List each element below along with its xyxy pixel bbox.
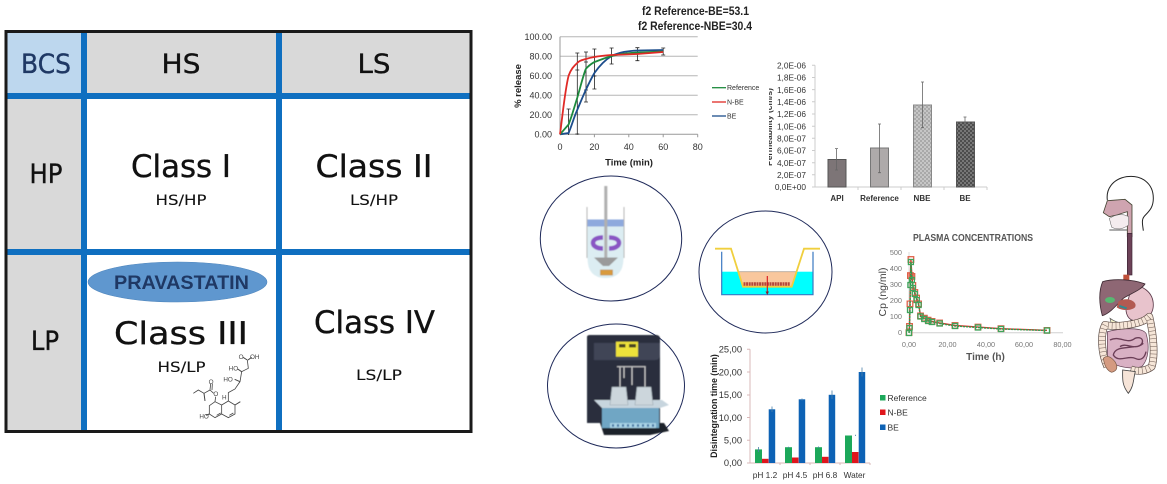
apical compartment (738, 272, 796, 287)
tick labels: 1,8E-06 (777, 72, 806, 82)
bar: reference (870, 148, 888, 187)
paddle shaft (604, 186, 607, 260)
circle: disintegration tester (548, 324, 684, 448)
large intestine (1102, 317, 1154, 371)
legend: BE (888, 422, 899, 432)
line chart: plasma concentrations: 60,00 (1015, 340, 1033, 349)
tablet (600, 270, 612, 275)
axis tick labels: 0.00 (534, 130, 552, 140)
axis title: time: Time (h) (966, 352, 1005, 363)
line chart: plasma concentrations: 0,00 (902, 340, 916, 349)
axis tick labels: 60.00 (529, 71, 552, 81)
tick labels: 0,0E+00 (775, 182, 806, 192)
line chart: plasma concentrations: 200 (890, 296, 902, 305)
line chart: plasma concentrations: 400 (890, 264, 902, 273)
axis title: release: % release (513, 64, 524, 108)
tick labels: 25,00 (719, 344, 742, 354)
header cell: BCS (6, 31, 81, 93)
line chart: percent release over time (513, 32, 759, 168)
bars: N-BE (762, 452, 858, 463)
tick labels: 5,00 (724, 436, 742, 446)
axis title: Disintegration time (min) (709, 354, 719, 458)
pravastatin ellipse (88, 262, 267, 302)
tick labels: 1,2E-06 (777, 109, 806, 119)
tick labels (719, 344, 742, 468)
circle: permeability transwell (699, 211, 832, 333)
head outline (1107, 176, 1153, 231)
line chart: percent release over time: 20 (589, 142, 599, 152)
label: HS: HS (162, 49, 200, 80)
axis tick labels: 40.00 (529, 90, 552, 100)
line chart: percent release over time: 0 (557, 142, 563, 152)
category labels: pH 1.2 (753, 470, 778, 480)
axis tick labels (524, 32, 552, 140)
pravastatin molecule: OH (250, 354, 260, 361)
category labels: Water (844, 470, 866, 480)
axis tick labels: 80.00 (529, 52, 552, 62)
class IV: Class IV (314, 305, 435, 341)
legend: Reference (888, 393, 927, 403)
tick labels: 2,0E-06 (777, 60, 806, 70)
small intestine (1107, 329, 1148, 368)
HS/HP: HS/HP (156, 193, 206, 209)
tick labels: 2,0E-07 (777, 170, 806, 180)
line chart: plasma concentrations: 100 (890, 312, 902, 321)
chart title: PLASMA CONCENTRATIONS (913, 233, 1033, 244)
line chart: percent release over time: 60 (658, 142, 668, 152)
tick labels: 0,00 (724, 458, 742, 468)
LS/HP: LS/HP (350, 193, 398, 209)
pravastatin molecule: O (209, 379, 214, 386)
series: red squares (909, 260, 1047, 333)
beaker outline (722, 252, 813, 295)
pancreas and duodenum (1117, 299, 1136, 310)
f2 similarity factor heading: f2 Reference-BE=53.1 (642, 6, 750, 18)
liver (1100, 280, 1145, 316)
tick labels: 15,00 (719, 390, 742, 400)
mouth and pharynx (1103, 199, 1132, 237)
tick labels: 6,0E-07 (777, 146, 806, 156)
line chart: plasma concentrations: 40,00 (977, 340, 995, 349)
label: HP: HP (30, 159, 62, 190)
class III: Class III (114, 316, 248, 352)
tick labels: 1,4E-06 (777, 97, 806, 107)
gallbladder (1105, 297, 1115, 303)
category labels: API (830, 194, 844, 203)
HS/LP: HS/LP (158, 360, 206, 376)
BCS classification table (6, 31, 471, 432)
pravastatin molecule: HO (199, 413, 209, 420)
glass platform (594, 400, 669, 408)
line chart: percent release over time: 80 (693, 142, 703, 152)
tick labels: 20,00 (719, 368, 742, 378)
category labels: pH 6.8 (813, 470, 838, 480)
line chart: plasma concentrations: 0 (898, 328, 902, 337)
clipped axis title: Permeability (cm/s) (764, 88, 774, 166)
tick labels (775, 60, 806, 192)
circle: dissolution apparatus (540, 176, 682, 301)
series: green squares (909, 262, 1047, 333)
axis title: time: Time (min) (605, 158, 653, 168)
bar chart: permeability (760, 60, 987, 203)
legend: N-BE (888, 408, 908, 418)
pravastatin molecule: HO (229, 366, 238, 373)
rectum (1123, 370, 1135, 393)
yellow display (616, 342, 638, 357)
legend: Reference (727, 85, 759, 92)
category labels (830, 194, 971, 203)
f2 similarity factor heading: f2 Reference-NBE=30.4 (638, 21, 753, 33)
pravastatin molecule: HO (223, 376, 233, 383)
LS/LP: LS/LP (356, 368, 402, 384)
legend: N-BE (727, 100, 744, 106)
legend: BE (727, 114, 737, 120)
instrument body (587, 335, 660, 423)
pravastatin label: PRAVASTATIN (114, 272, 249, 294)
curve: BE (560, 50, 663, 134)
curve: N-BE (560, 52, 663, 134)
curve: reference (560, 52, 663, 134)
lifting arm (617, 367, 646, 388)
line chart: plasma concentrations: 20,00 (938, 340, 957, 349)
error bars (758, 368, 862, 452)
pravastatin molecule: H (222, 394, 227, 401)
tick labels: 1,6E-06 (777, 85, 806, 95)
tick labels: 8,0E-07 (777, 134, 806, 144)
water bath (602, 407, 659, 428)
right beaker (635, 387, 653, 405)
pravastatin molecule: O (213, 391, 218, 398)
line chart: plasma concentrations: 300 (890, 280, 902, 289)
label: LP: LP (31, 326, 59, 357)
bar: API (828, 160, 846, 187)
insert outline (715, 249, 820, 287)
error bars (567, 48, 665, 135)
vessel (588, 226, 624, 278)
paddle (594, 258, 618, 266)
category labels (753, 470, 866, 480)
tick labels: 1,0E-06 (777, 121, 806, 131)
legend (880, 393, 927, 432)
line chart: plasma concentrations (877, 233, 1072, 363)
category labels: NBE (914, 194, 931, 203)
pravastatin molecule: O (239, 354, 244, 361)
row header cells (6, 99, 81, 432)
transport arrow (766, 276, 768, 293)
class I: Class I (131, 149, 231, 185)
bars: BE (769, 372, 865, 463)
axis title: concentration: Cp (ng/ml) (877, 267, 889, 317)
error bars (835, 82, 966, 173)
rotation arrows (593, 238, 619, 248)
tick labels: 4,0E-07 (777, 158, 806, 168)
f2 similarity factor heading (638, 6, 753, 33)
cecum and appendix (1103, 356, 1117, 372)
label: BCS: BCS (21, 49, 71, 80)
basolateral water (722, 272, 813, 295)
category labels: pH 4.5 (783, 470, 808, 480)
pravastatin molecule (193, 354, 260, 420)
bar: BE (956, 122, 974, 187)
header cell: high and low solubility (87, 31, 471, 93)
tick labels: 10,00 (719, 413, 742, 423)
icon: human digestive system (1100, 176, 1154, 393)
legend (712, 85, 759, 120)
class II: Class II (316, 149, 432, 185)
category labels: Reference (860, 194, 899, 203)
axis tick labels: 20.00 (529, 110, 552, 120)
category labels: BE (959, 194, 971, 203)
line chart: plasma concentrations: 500 (890, 248, 902, 257)
bar chart: disintegration time (709, 344, 927, 480)
axis tick labels: 100.00 (524, 32, 552, 42)
bars: reference (755, 436, 852, 463)
line chart: percent release over time: 40 (624, 142, 634, 152)
line chart: plasma concentrations: 80,00 (1053, 340, 1072, 349)
stomach (1126, 285, 1153, 321)
bar: NBE (914, 105, 932, 187)
label: LS: LS (358, 49, 390, 80)
base plate (600, 423, 669, 435)
left beaker (610, 387, 628, 405)
cell monolayer (744, 282, 790, 286)
esophagus (1127, 233, 1132, 275)
